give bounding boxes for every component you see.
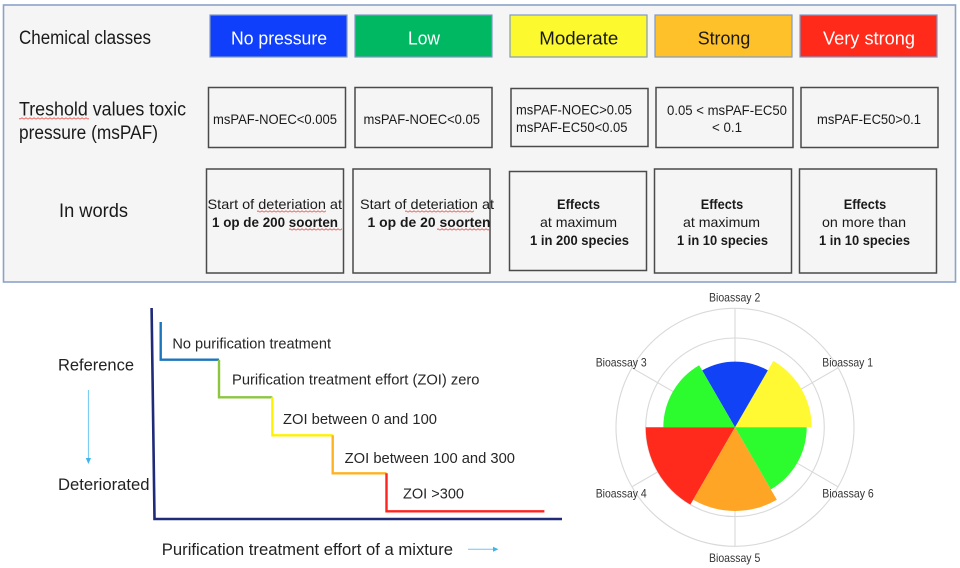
in words: strong [654,169,792,273]
chart: purification treatment staircase [58,308,562,559]
step: ZOI 0 to 100 [272,397,437,435]
label: bioassay 2: Bioassay 2 [709,292,760,305]
class: low [355,15,492,57]
sector: bioassay 6 green [735,427,807,489]
heading: in words: In words [59,201,128,222]
in words: strong: at maximum [683,214,760,230]
label: deteriorated: Deteriorated [58,476,150,494]
in words: low: 1 op de 20 soorten [368,214,490,230]
in words: very strong: on more than [822,214,906,230]
axes [152,308,562,519]
in words: moderate: Effects [557,196,600,212]
heading: threshold values [19,100,186,144]
threshold: strong [656,88,793,148]
sector: bioassay 1 yellow [735,361,812,427]
in words: no pressure [206,169,344,273]
label: bioassay 4: Bioassay 4 [596,487,647,500]
threshold: very strong: msPAF-EC50>0.1 [817,111,921,127]
in words: very strong: 1 in 10 species [819,232,910,248]
in words: low [353,169,494,273]
in words: strong: 1 in 10 species [677,232,768,248]
in words: low: Start of deteriation at [360,196,494,212]
step: ZOI zero: Purification treatment effort (ZOI) zero [232,372,480,388]
in words: moderate [510,172,646,270]
step: ZOI zero [219,360,480,397]
sector: bioassay 4 red [646,427,735,505]
label: bioassay 3: Bioassay 3 [596,357,647,370]
class: moderate [510,15,647,57]
sector: bioassay 5 orange [693,427,777,511]
label: bioassay 1: Bioassay 1 [822,357,873,370]
class: no pressure: No pressure [231,28,327,48]
step: ZOI 0 to 100: ZOI between 0 and 100 [283,412,437,428]
in words: very strong [800,169,936,273]
threshold: strong: 0.05 < msPAF-EC50 [667,102,787,118]
step: no purification treatment: No purification treatment [172,337,331,353]
in words: no pressure: 1 op de 200 soorten [212,214,338,230]
x axis label: Purification treatment effort of a mixture [162,541,453,559]
class: strong: Strong [698,28,750,48]
class: very strong [800,15,937,57]
threshold: no pressure [208,88,346,148]
panel: chemical classes table [4,5,956,282]
class: low: Low [408,28,441,48]
threshold: moderate [511,88,648,146]
arrow: increasing effort [468,547,498,552]
arrow: reference to deteriorated [86,390,91,464]
sector: bioassay 3 green [663,365,735,427]
class: no pressure [210,15,347,57]
step: ZOI above 300: ZOI >300 [403,487,464,503]
in words: no pressure: Start of deteriation at [208,196,342,212]
in words: moderate: at maximum [540,214,617,230]
heading: threshold values: Treshold values toxic [19,100,186,120]
heading: threshold values: pressure (msPAF) [19,123,158,144]
in words: strong: Effects [701,196,743,212]
step: ZOI above 300 [386,473,544,511]
heading: chemical classes: Chemical classes [19,28,151,49]
step: no purification treatment [161,322,331,360]
label: bioassay 6: Bioassay 6 [822,487,874,500]
label: bioassay 5: Bioassay 5 [709,552,760,565]
threshold: very strong [801,88,938,148]
in words: very strong: Effects [844,196,886,212]
class: very strong: Very strong [823,28,915,48]
radar grid [616,308,854,546]
label: reference: Reference [58,357,134,375]
threshold: moderate: msPAF-EC50<0.05 [516,119,628,135]
step: ZOI 100 to 300 [333,435,515,473]
threshold: no pressure: msPAF-NOEC<0.005 [213,111,337,127]
threshold: strong: < 0.1 [712,119,742,135]
class: moderate: Moderate [539,28,618,48]
chart: bioassay radar [596,292,874,565]
in words: moderate: 1 in 200 species [530,232,629,248]
step: ZOI 100 to 300: ZOI between 100 and 300 [345,451,515,467]
sector: bioassay 2 blue [702,362,768,427]
threshold: low [355,88,492,148]
threshold: low: msPAF-NOEC<0.05 [364,111,480,127]
threshold: moderate: msPAF-NOEC>0.05 [516,102,632,118]
class: strong [655,15,792,57]
